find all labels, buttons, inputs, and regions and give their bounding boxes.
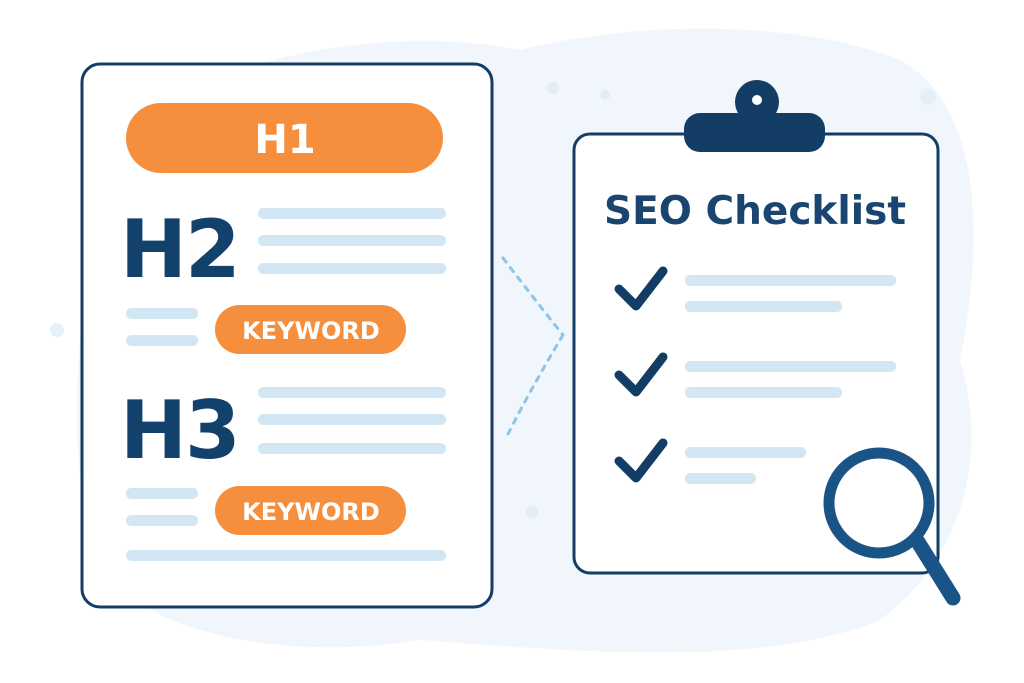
icon: clip: [684, 80, 825, 152]
H2 heading: [120, 203, 446, 296]
panel: clipboard: [574, 80, 938, 573]
keyword pill 1: [126, 305, 406, 354]
keyword pill 1: KEYWORD: [242, 317, 380, 345]
keyword pill 2: KEYWORD: [242, 498, 380, 526]
panel: document outline: [82, 64, 492, 607]
H3 heading: H3: [120, 384, 239, 477]
H1 pill: H1: [254, 117, 316, 163]
keyword pill 2: [126, 486, 406, 535]
H2 heading: H2: [120, 203, 239, 296]
arrow: dotted connector: [503, 258, 563, 440]
H1 pill: [126, 103, 443, 173]
H3 heading: [120, 384, 446, 477]
title: SEO Checklist: [604, 189, 906, 234]
icon: magnifier: [829, 453, 953, 598]
checklist items: [619, 271, 896, 484]
